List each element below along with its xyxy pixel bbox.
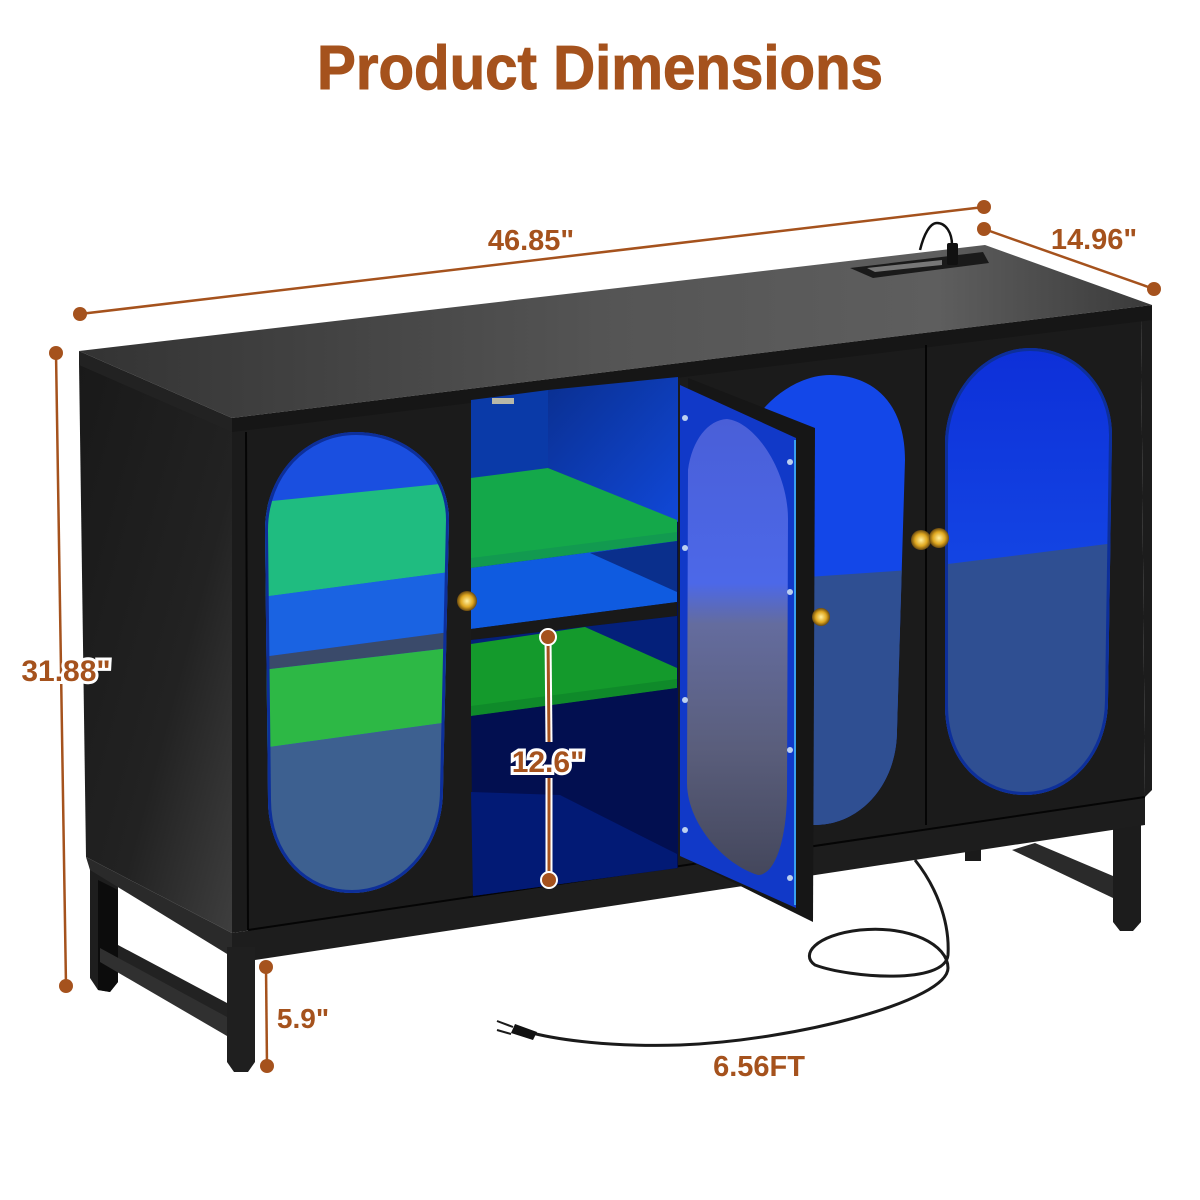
cabinet	[79, 223, 1152, 1072]
dimension: leg 5.9	[259, 960, 329, 1073]
side rail	[86, 857, 232, 957]
dimension: leg 5.9: 5.9"	[277, 1003, 329, 1034]
dimension: height 31.88: 31.88"	[21, 655, 111, 688]
top front edge	[232, 305, 1152, 432]
back right leg and frame	[965, 808, 1141, 931]
door screws	[682, 415, 793, 881]
power strip	[850, 223, 989, 278]
upper green shelf	[471, 468, 677, 568]
open compartment	[471, 377, 678, 896]
title: Product Dimensions	[317, 34, 883, 103]
middle oval window	[764, 375, 905, 825]
plug	[511, 1024, 537, 1040]
dimension: depth 14.96: 14.96"	[1051, 224, 1137, 256]
table top	[79, 245, 1152, 418]
cord length label: 6.56FT	[713, 1051, 805, 1083]
side panel	[79, 362, 232, 933]
dimension: shelf 12.6	[512, 629, 584, 888]
dimension: width 46.85	[73, 200, 991, 321]
front face	[232, 316, 1145, 933]
base rail	[232, 797, 1145, 960]
door seams	[246, 345, 1145, 930]
left crossbar	[100, 945, 227, 1036]
dimension: shelf 12.6: 12.6"	[512, 746, 584, 779]
dimension: height 31.88	[21, 346, 111, 993]
gold handles	[457, 528, 949, 626]
dimension: depth 14.96	[977, 222, 1161, 296]
power cord	[497, 860, 948, 1045]
right side strip	[1141, 310, 1152, 797]
lower green shelf	[471, 627, 677, 716]
top left edge	[79, 351, 232, 432]
back left leg	[90, 868, 118, 992]
black divider	[471, 602, 677, 640]
front left leg	[227, 947, 255, 1072]
right oval window	[940, 345, 1115, 800]
frosted oval	[687, 419, 788, 875]
door light strip	[794, 440, 796, 905]
hinge light	[492, 398, 514, 404]
dimension: width 46.85: 46.85"	[488, 225, 574, 257]
blue shelf surface	[471, 541, 677, 629]
open door	[680, 378, 815, 922]
left oval window	[260, 425, 455, 900]
